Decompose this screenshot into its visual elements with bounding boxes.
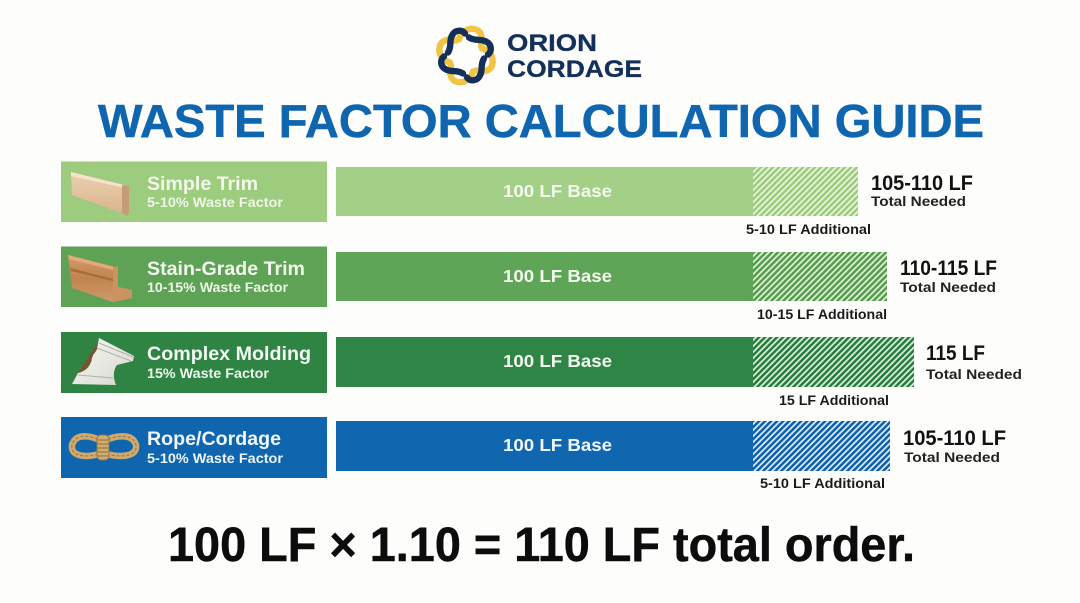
label: total needed: Total Needed: [904, 449, 1000, 465]
icon: crown molding: [72, 338, 134, 385]
bar: additional hatch: [753, 252, 887, 301]
label: total needed: 105-110 LF: [903, 427, 1006, 450]
label: total needed: [926, 342, 1022, 382]
label: total needed: [900, 257, 997, 295]
label: total needed: Total Needed: [900, 279, 996, 295]
label: total needed: Total Needed: [926, 366, 1022, 382]
bar: 100 LF base: [336, 337, 753, 387]
label: total needed: 115 LF: [926, 342, 985, 365]
icon: simple trim board: [71, 172, 129, 216]
label: total needed: Total Needed: [871, 193, 966, 209]
icon: stain-grade trim: [68, 255, 132, 302]
panel: Simple Trim: 5-10% Waste Factor: [147, 195, 284, 210]
bar: 100 LF base: [336, 421, 753, 471]
panel: Complex Molding: Complex Molding: [147, 344, 311, 365]
bar: 100 LF base: 100 LF Base: [503, 351, 612, 371]
panel: Simple Trim: [61, 162, 327, 222]
title: WASTE FACTOR CALCULATION GUIDE: [98, 95, 984, 147]
panel: Stain-Grade Trim: Stain-Grade Trim: [147, 259, 305, 280]
bar: 100 LF base: 100 LF Base: [503, 266, 612, 286]
row: Stain-Grade Trim: [61, 246, 997, 322]
icon: coiled rope: [72, 435, 136, 460]
label: total needed: [903, 427, 1006, 465]
row: Complex Molding: [61, 332, 1022, 408]
bar: 100 LF base: 100 LF Base: [503, 435, 612, 455]
panel: Simple Trim: Simple Trim: [147, 174, 258, 195]
logo wordmark: ORION: [507, 30, 597, 57]
bar: additional hatch: [753, 337, 914, 387]
icon: interlocked rope ring: [439, 29, 493, 82]
label: additional: 5-10 LF Additional: [746, 221, 871, 237]
panel: Rope/Cordage: [61, 417, 327, 478]
panel: Complex Molding: [61, 332, 327, 393]
label: total needed: [871, 172, 973, 209]
formula: 100 LF × 1.10 = 110 LF total order.: [168, 519, 915, 572]
row: Rope/Cordage: [61, 417, 1006, 491]
panel: Complex Molding: 15% Waste Factor: [147, 366, 270, 381]
label: additional: 5-10 LF Additional: [760, 475, 885, 491]
panel: Stain-Grade Trim: 10-15% Waste Factor: [147, 280, 289, 295]
logo wordmark: CORDAGE: [507, 56, 642, 83]
bar: 100 LF base: [336, 252, 753, 301]
logo wordmark: [507, 30, 642, 83]
row: Simple Trim: [61, 162, 973, 237]
label: total needed: 105-110 LF: [871, 172, 973, 195]
label: additional: 15 LF Additional: [779, 392, 889, 408]
panel: Rope/Cordage: 5-10% Waste Factor: [147, 451, 284, 466]
bar: additional hatch: [753, 167, 858, 216]
bar: 100 LF base: 100 LF Base: [503, 181, 612, 201]
logo: Orion Cordage: [439, 29, 642, 83]
bar: additional hatch: [753, 421, 890, 471]
label: additional: 10-15 LF Additional: [757, 306, 887, 322]
panel: Stain-Grade Trim: [61, 246, 327, 307]
bar: 100 LF base: [336, 167, 753, 216]
panel: Rope/Cordage: Rope/Cordage: [147, 429, 281, 450]
label: total needed: 110-115 LF: [900, 257, 997, 280]
